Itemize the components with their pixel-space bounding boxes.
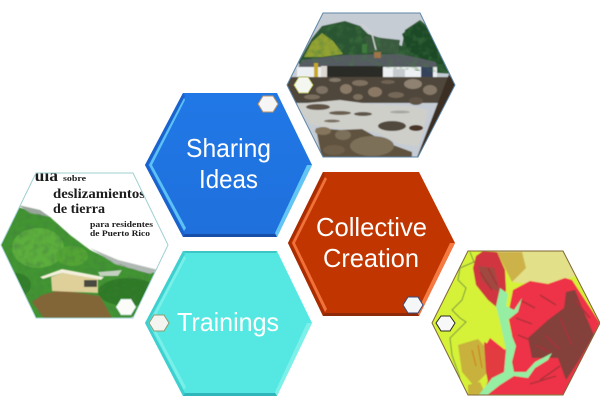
photo hexagon: landslide debris at house [285,10,458,160]
guide title text: Guía [21,166,59,185]
label: Sharing Ideas: Sharing [186,133,271,163]
hexagon: Sharing Ideas [145,93,312,237]
label: Collective Creation: Collective [316,212,427,242]
icon: small hexagon badge [258,96,278,112]
icon: small hexagon badge [403,297,423,313]
guide title text: sobre [63,173,86,183]
icon: small hexagon badge [149,315,169,331]
label: Collective Creation: Creation [323,243,419,273]
icon: small hexagon badge [294,77,313,93]
label: Collective Creation [316,212,427,273]
label: Sharing Ideas [186,133,271,194]
guide title text: para residentes [90,219,154,229]
guide title text: de tierra [53,201,105,216]
label: Sharing Ideas: Ideas [199,164,258,194]
icon: small hexagon badge [116,299,136,315]
guide title text [36,174,153,236]
hexagon: Collective Creation [288,172,455,316]
hexagon: Trainings [145,251,312,396]
photo hexagon: landslide guide cover [0,166,170,320]
map hexagon: landslide hazard map [430,249,600,397]
guide title text: deslizamientos [53,186,145,201]
guide title text: de Puerto Rico [90,228,150,238]
icon: small hexagon badge [436,316,455,331]
label: Trainings: Trainings [177,307,279,337]
